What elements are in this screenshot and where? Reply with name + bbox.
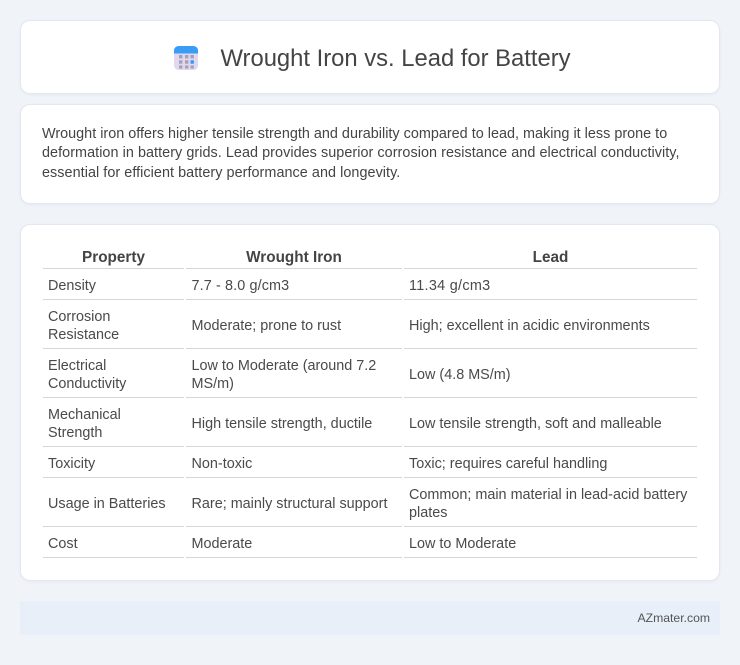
row: mechanical strength: Strength (48, 425, 102, 441)
row: usage in batteries: Common; main material in lead-acid battery (409, 487, 687, 503)
row: mechanical strength: Mechanical (48, 407, 121, 423)
summary paragraph: deformation in battery grids. Lead provides superior corrosion resistance and electrical conductivity, (42, 145, 680, 161)
row: mechanical strength: Low tensile strength, soft and malleable (409, 416, 662, 432)
row: cost: Moderate (192, 536, 252, 552)
table header: Wrought Iron (246, 249, 342, 266)
summary paragraph (42, 126, 680, 181)
row: corrosion resistance: High; excellent in acidic environments (409, 318, 650, 334)
panel: summary text (20, 104, 720, 204)
row: electrical conductivity: MS/m) (192, 376, 234, 392)
row: corrosion resistance (43, 309, 697, 349)
row: electrical conductivity (43, 358, 697, 398)
icon: calendar (174, 46, 198, 70)
row: cost (43, 536, 697, 558)
row: usage in batteries: plates (409, 505, 447, 521)
row: density: 7.7 - 8.0 g/cm3 (192, 278, 289, 294)
row: mechanical strength (43, 407, 697, 447)
row: electrical conductivity: Conductivity (48, 376, 126, 392)
panel: title (20, 20, 720, 94)
row: cost: Low to Moderate (409, 536, 516, 552)
row: density (43, 278, 697, 300)
row: electrical conductivity: Low (4.8 MS/m) (409, 367, 511, 383)
row: usage in batteries (43, 487, 697, 527)
row: mechanical strength: High tensile strength, ductile (192, 416, 372, 432)
table header: Property (82, 249, 145, 266)
row: electrical conductivity: Low to Moderate (around 7.2 (192, 358, 376, 374)
row: cost: Cost (48, 536, 78, 552)
row: corrosion resistance: Resistance (48, 327, 119, 343)
row: density: 11.34 g/cm3 (409, 278, 490, 294)
row: corrosion resistance: Moderate; prone to rust (192, 318, 341, 334)
footer brand: AZmater.com (638, 611, 710, 625)
row: usage in batteries: Usage in Batteries (48, 496, 166, 512)
comparison table (43, 249, 697, 558)
row: toxicity: Toxic; requires careful handling (409, 456, 607, 472)
table header (43, 249, 697, 269)
row: toxicity (43, 456, 697, 478)
summary paragraph: Wrought iron offers higher tensile strength and durability compared to lead, making it less prone to (42, 126, 667, 142)
row: toxicity: Non-toxic (192, 456, 252, 472)
row: corrosion resistance: Corrosion (48, 309, 110, 325)
row: density: Density (48, 278, 96, 294)
table header: Lead (533, 249, 568, 266)
footer (20, 601, 720, 635)
panel: comparison table (20, 224, 720, 581)
heading: Wrought Iron vs. Lead for Battery (220, 45, 571, 72)
row: electrical conductivity: Electrical (48, 358, 106, 374)
row: usage in batteries: Rare; mainly structural support (192, 496, 387, 512)
summary paragraph: essential for efficient battery performance and longevity. (42, 165, 400, 181)
row: toxicity: Toxicity (48, 456, 95, 472)
